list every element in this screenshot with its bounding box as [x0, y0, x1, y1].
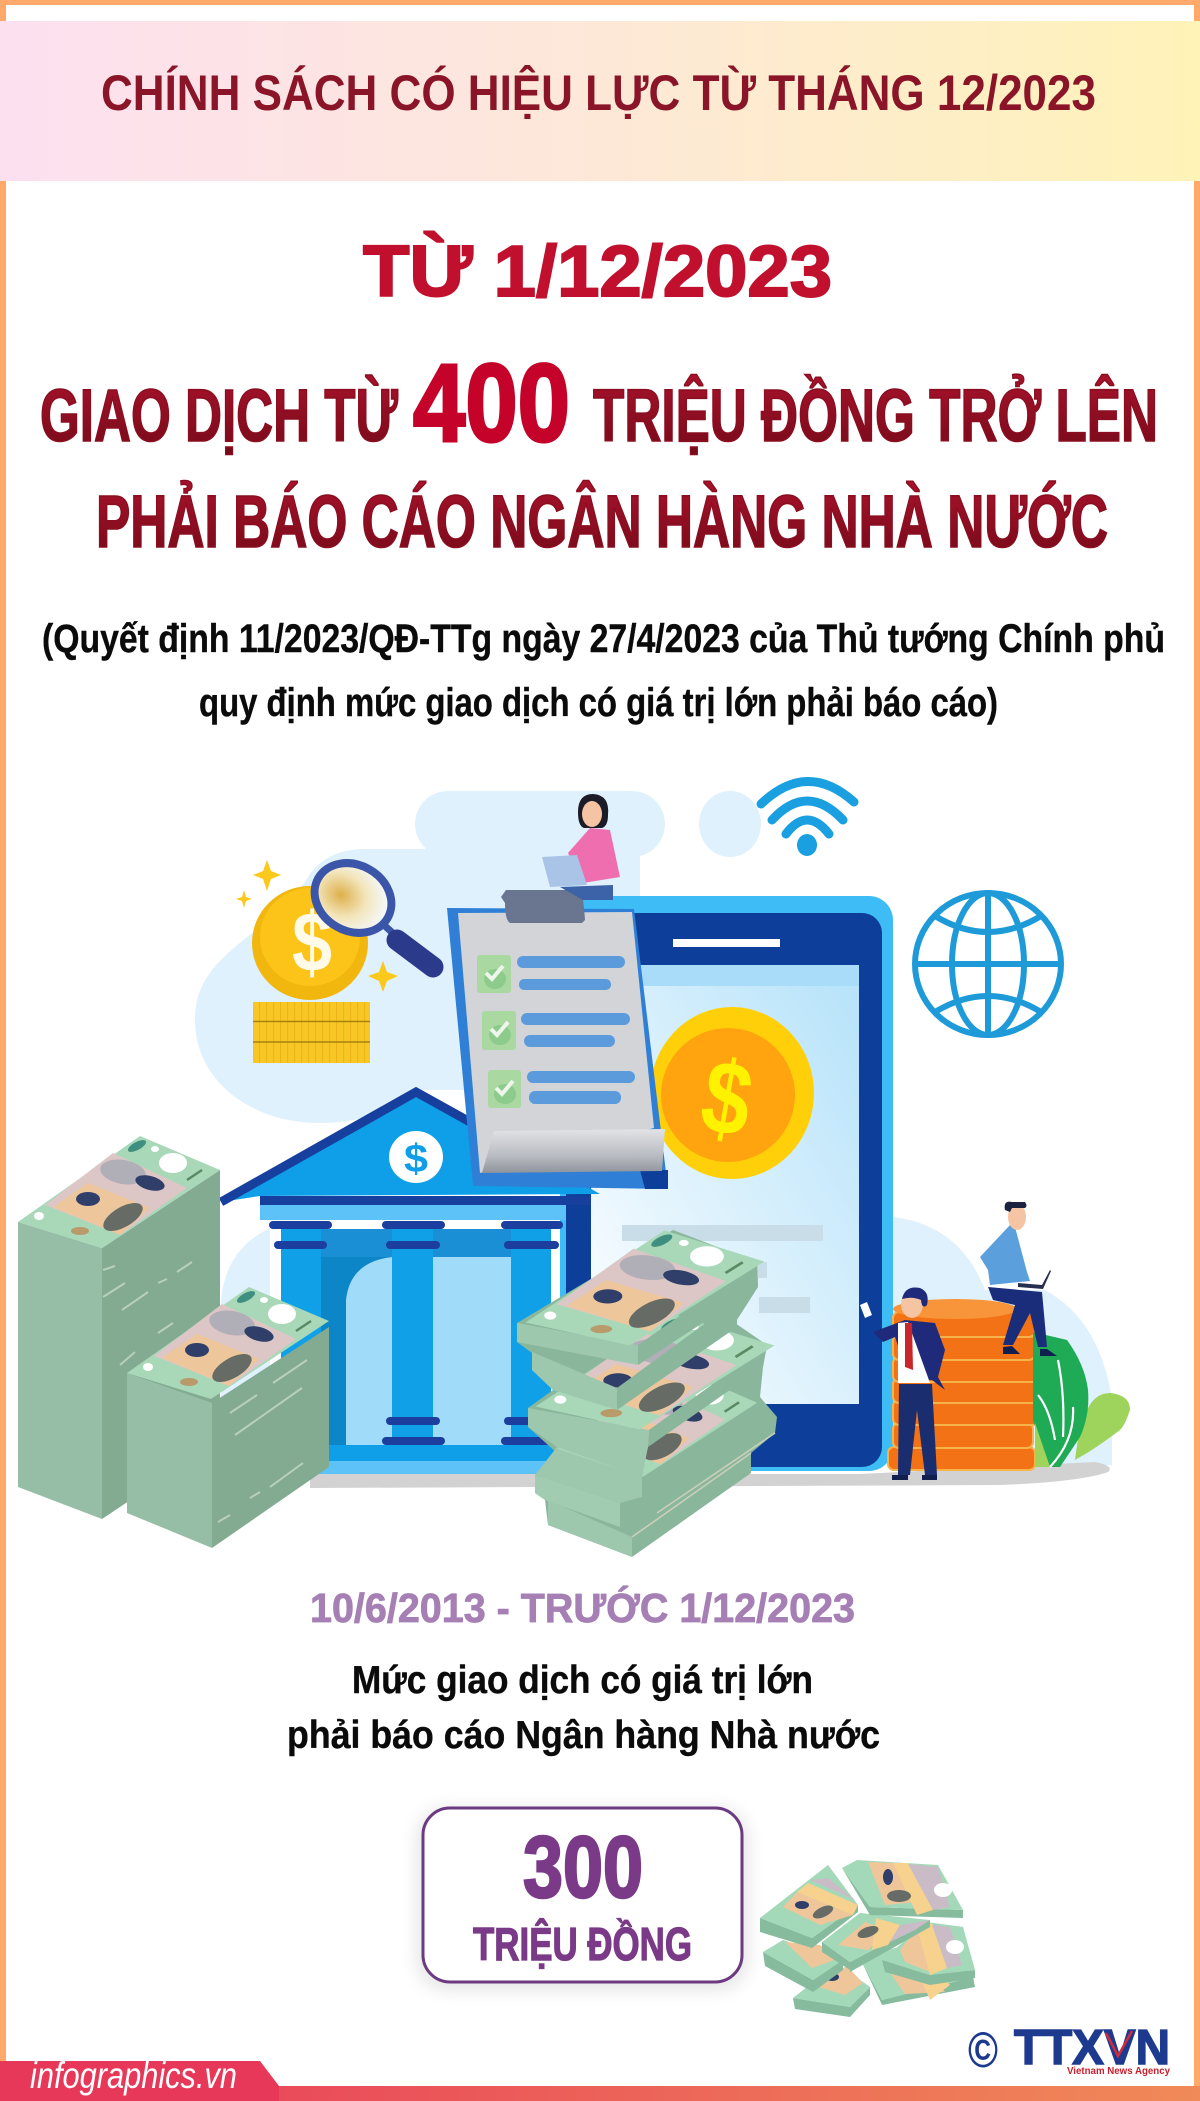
footer bar — [0, 2055, 1200, 2101]
period label: 10/6/2013 - TRƯỚC 1/12/2023 — [310, 1585, 855, 1631]
sparkles — [236, 860, 398, 992]
highlighted amount 400: 400 — [413, 342, 570, 465]
description text: phải báo cáo Ngân hàng Nhà nước — [287, 1714, 880, 1757]
header band — [0, 21, 1200, 181]
magnifying glass — [302, 849, 433, 967]
header title: CHÍNH SÁCH CÓ HIỆU LỰC TỪ THÁNG 12/2023 — [101, 65, 1096, 121]
checklist rows — [477, 955, 635, 1108]
value box 300 million — [417, 1808, 748, 1990]
bundle top — [842, 1860, 963, 1918]
main headline — [40, 342, 1158, 563]
big gold coin — [650, 1007, 814, 1179]
third bundle — [527, 1311, 782, 1477]
central illustration — [18, 781, 1130, 1557]
big gold coin: $ — [693, 1038, 761, 1160]
description text: Mức giao dịch có giá trị lớn — [352, 1659, 813, 1702]
value box 300 million: TRIỆU ĐỒNG — [473, 1918, 692, 1970]
icon: globe — [915, 893, 1061, 1035]
money stack front — [127, 1287, 329, 1548]
phone — [560, 896, 893, 1471]
main date heading: TỪ 1/12/2023 — [363, 231, 832, 312]
logo: TTXVN: © — [968, 2022, 998, 2078]
top bundle — [517, 1227, 772, 1365]
bank building: $ — [404, 1137, 428, 1181]
magnifier and coins — [236, 849, 433, 1063]
bank building — [221, 1088, 600, 1474]
gold dollar coin — [252, 886, 368, 1000]
footer website: infographics.vn — [30, 2055, 237, 2096]
bundle right lower — [860, 1935, 975, 2005]
woman with laptop — [542, 794, 620, 900]
fourth bundle — [535, 1364, 762, 1503]
money stack center — [517, 1227, 782, 1557]
bundle left lower — [763, 1940, 843, 1992]
legal reference text: quy định mức giao dịch có giá trị lớn phải báo cáo) — [199, 681, 998, 725]
logo: TTXVN: TTXVN — [1014, 2021, 1170, 2075]
gold dollar coin: $ — [292, 895, 332, 989]
bundle center — [822, 1913, 930, 1972]
stack silhouette — [517, 1230, 777, 1557]
icon: wifi — [761, 781, 854, 856]
ground shadow — [310, 1462, 1110, 1488]
bottom bundle — [535, 1433, 775, 1557]
clipboard checklist — [447, 890, 668, 1189]
bundle right upper — [882, 1922, 975, 1985]
logo: TTXVN: Vietnam News Agency — [1067, 2066, 1170, 2077]
bundle bottom center — [793, 1963, 870, 2017]
description text — [287, 1659, 880, 1757]
standing businessman — [860, 1287, 945, 1480]
background clouds — [195, 791, 1112, 1465]
small money pile — [760, 1860, 975, 2017]
seated man with laptop — [980, 1202, 1057, 1356]
coin pile orange — [888, 1299, 1044, 1470]
value box 300 million: 300 — [523, 1819, 643, 1916]
legal reference text — [42, 617, 1165, 725]
money stack tall — [18, 1136, 220, 1519]
bundle left upper — [760, 1865, 858, 1948]
headline line 1 start: GIAO DỊCH TỪ — [40, 374, 398, 457]
coin stack — [253, 1002, 370, 1063]
plants — [1033, 1332, 1130, 1467]
second bundle — [532, 1300, 737, 1410]
